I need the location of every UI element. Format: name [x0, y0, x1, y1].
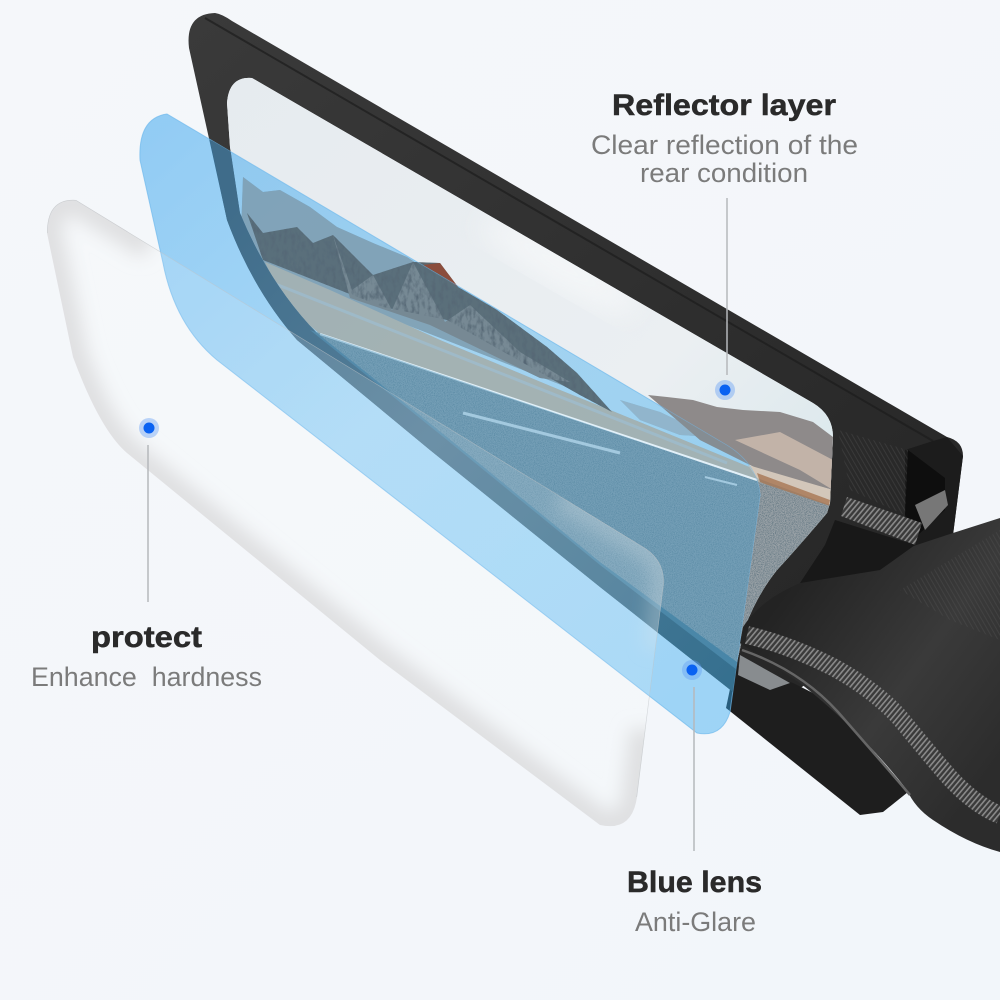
silver clip [915, 490, 948, 530]
callout: reflector layer [591, 89, 858, 400]
arm ribbed top [900, 530, 1000, 640]
bracket recess [905, 450, 945, 535]
description: Clear reflection of the [591, 130, 858, 160]
heading: protect [91, 621, 202, 654]
bracket block [800, 520, 915, 583]
description: Enhance hardness [31, 662, 262, 692]
callout: protect [31, 418, 262, 692]
callout: blue lens [627, 660, 762, 937]
leader line [147, 445, 149, 602]
toothed silver strip [841, 497, 922, 545]
film grey edge glow [47, 200, 645, 826]
marker dot [139, 418, 159, 438]
description [591, 130, 858, 188]
frame bevel edge [205, 18, 933, 441]
film body [160, 252, 664, 696]
frame band through lens [210, 140, 745, 692]
blue lens [139, 114, 760, 734]
marker dot [715, 380, 735, 400]
description: Anti-Glare [635, 907, 756, 937]
sky [220, 70, 840, 680]
heading: Reflector layer [612, 89, 836, 122]
marker dot [682, 660, 702, 680]
mirror arm [740, 518, 1000, 852]
film road-side highlight [560, 497, 664, 650]
frame ribbed face [838, 430, 908, 515]
arm ribbed ridge [747, 635, 1000, 815]
reflected landscape [220, 70, 840, 680]
road coloured pad [738, 655, 790, 690]
lower housing block [726, 665, 908, 815]
lens sheet [140, 114, 760, 734]
landscape through lens [242, 177, 760, 669]
leader line [726, 198, 728, 375]
protective film [47, 200, 664, 826]
arm lower lip [742, 650, 910, 795]
film top and right edge [47, 200, 664, 797]
mirror assembly [189, 13, 1000, 852]
mirror frame [189, 13, 963, 720]
heading: Blue lens [627, 866, 762, 899]
leader line [693, 687, 695, 851]
description: rear condition [640, 158, 808, 188]
frame side face [905, 437, 963, 560]
